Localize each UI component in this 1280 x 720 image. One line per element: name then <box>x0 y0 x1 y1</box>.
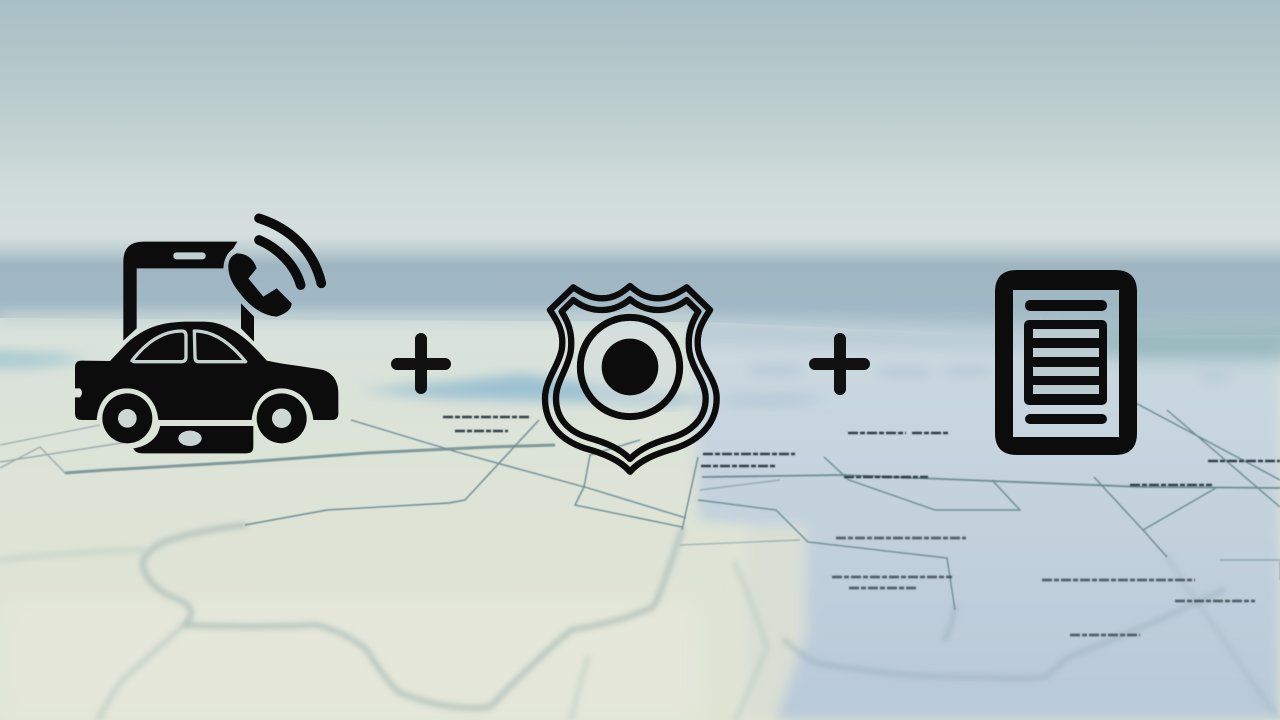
icon: plus sign <box>815 339 864 389</box>
car lower bumper <box>133 426 253 453</box>
icon: document tablet <box>995 270 1137 455</box>
signal waves <box>259 218 321 285</box>
map roads: sharp background network <box>0 400 1280 610</box>
map label smudges <box>443 417 1280 635</box>
wheels <box>102 393 152 443</box>
phone handset <box>228 253 292 317</box>
car body <box>75 322 338 420</box>
icon: plus sign <box>397 339 445 388</box>
icon: police badge shield <box>545 286 717 472</box>
map roads: soft foreground <box>0 525 1280 720</box>
map water patches <box>0 350 1230 406</box>
phone behind car <box>123 242 254 342</box>
icon: car with phone <box>75 218 338 453</box>
car windows <box>132 331 246 362</box>
